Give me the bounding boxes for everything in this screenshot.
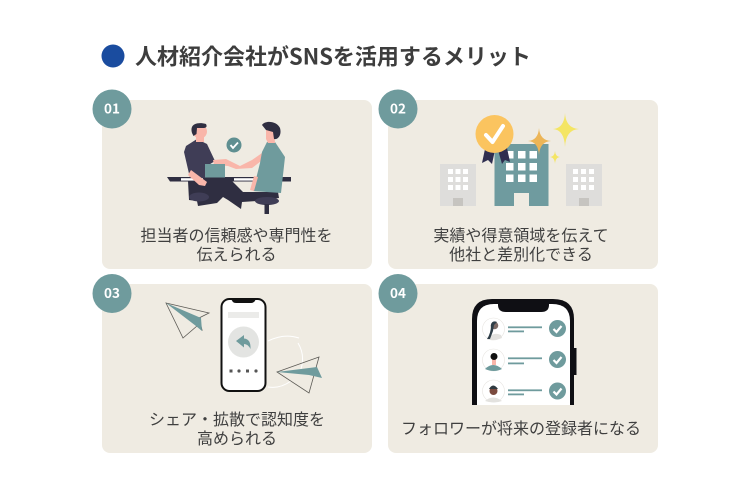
number badge 02: [378, 90, 418, 128]
number badge 03: 03: [104, 282, 120, 302]
caption 04: フォロワーが将来の登録者になる: [401, 415, 641, 439]
follower row 3: [482, 380, 566, 402]
card background 04: [388, 284, 658, 453]
number badge 04: 04: [390, 282, 406, 302]
caption 02: 実績や得意領域を伝えて: [433, 222, 609, 246]
title dot: [102, 44, 124, 68]
caption 02: 他社と差別化できる: [449, 241, 593, 265]
number badge 02: 02: [390, 98, 406, 118]
illustration: phone and paper planes: [166, 298, 322, 393]
number badge 01: [92, 90, 132, 128]
illustration: phone with followers: [472, 299, 576, 405]
follower row 2: [482, 349, 566, 371]
caption 01: 伝えられる: [196, 241, 277, 265]
card background 02: [388, 100, 658, 269]
number badge 04: [378, 274, 418, 313]
card background 01: [102, 100, 372, 269]
illustration: buildings and medal: [440, 113, 602, 206]
follower row 1: [482, 318, 566, 340]
caption 01: 担当者の信頼感や専門性を: [140, 222, 333, 246]
number badge 03: [92, 274, 132, 313]
title: 人材紹介会社がSNSを活用するメリット: [135, 40, 531, 72]
number badge 01: 01: [104, 98, 120, 118]
caption 03: シェア・拡散で認知度を: [149, 406, 325, 430]
panel: 02 achievements: [378, 90, 658, 269]
caption 03: 高められる: [197, 425, 277, 449]
card background 03: [102, 284, 372, 453]
panel: 01 trust: [92, 90, 372, 269]
illustration: handshake: [167, 122, 291, 214]
panel: 04 followers: [378, 274, 658, 453]
panel: 03 sharing: [92, 274, 372, 453]
